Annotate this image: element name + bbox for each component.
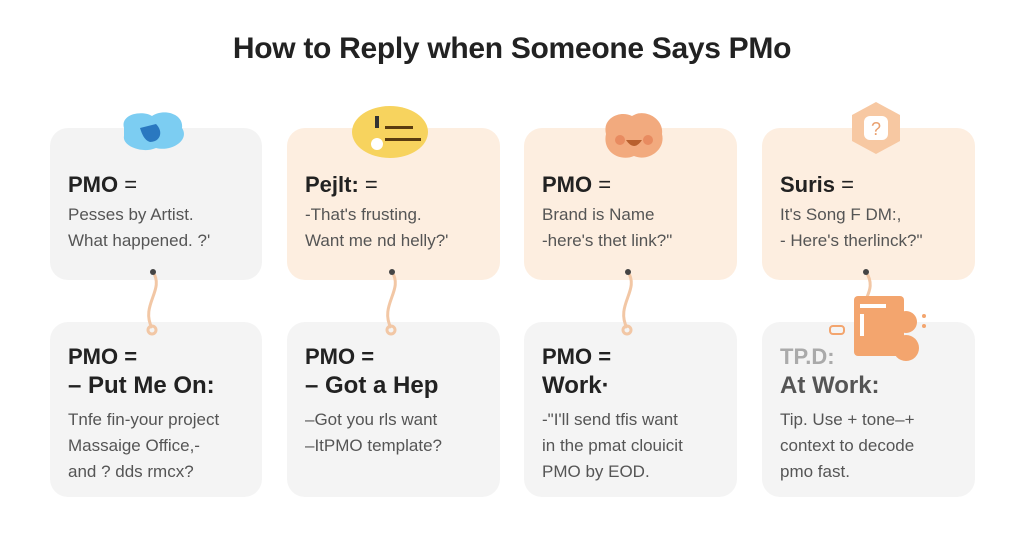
panel: top 3: -here's thet link?" [542,231,672,250]
panel: bottom 3 [524,322,737,497]
panel: bottom 1: Massaige Office,- [68,436,200,455]
icon: orange fluffy [605,113,663,158]
panel: top 3 [524,128,737,280]
panel: top 4: It's Song F DM:, [780,205,901,224]
panel: bottom 1: PMO = [68,344,137,369]
icon: work person board [829,296,926,361]
panel: top 4: Suris = [780,172,854,197]
panel: top 2: Pejlt: = [305,172,378,197]
panel: top 2 [287,128,500,280]
panel: top 3: Brand is Name [542,205,654,224]
panel: bottom 4: TP.D: [780,344,835,369]
panel: bottom 2: –ItPMO template? [305,436,442,455]
panel: bottom 1: – Put Me On: [68,372,215,399]
icon: yellow bubble [352,106,428,158]
panel: top 2: -That's frusting. [305,205,422,224]
panel: top 3: PMO = [542,172,611,197]
panel: bottom 2 [287,322,500,497]
panel: bottom 4: context to decode [780,436,914,455]
title: How to Reply when Someone Says PMo [233,32,791,65]
panel: top 4: - Here's therlinck?" [780,231,922,250]
panel: top 1: What happened. ?' [68,231,210,250]
panel: bottom 3: -"I'll send tfis want [542,410,678,429]
panel: top 1 [50,128,262,280]
panel: bottom 1: and ? dds rmcx? [68,462,194,481]
icon: hexagon question [852,102,900,154]
panel: bottom 1: Tnfe fin-your project [68,410,219,429]
panel: top 1: Pesses by Artist. [68,205,194,224]
panel: bottom 3: PMO = [542,344,611,369]
panel: top 1: PMO = [68,172,137,197]
panel: bottom 4: pmo fast. [780,462,850,481]
panel: bottom 4: At Work: [780,372,880,399]
icon: blue cloud [124,112,184,150]
panel: bottom 4 [762,322,975,497]
panel: bottom 2: PMO = [305,344,374,369]
panel: top 2: Want me nd helly?' [305,231,448,250]
panel: bottom 3: Work· [542,372,610,399]
panel: bottom 2: –Got you rls want [305,410,437,429]
panel: bottom 3: in the pmat clouicit [542,436,683,455]
icon: hexagon question: ? [871,119,881,139]
panel: bottom 4: Tip. Use + tone–+ [780,410,915,429]
panel: bottom 3: PMO by EOD. [542,462,650,481]
panel: bottom 1 [50,322,262,497]
panel: bottom 2: – Got a Hep [305,372,438,399]
panel: top 4 [762,128,975,280]
